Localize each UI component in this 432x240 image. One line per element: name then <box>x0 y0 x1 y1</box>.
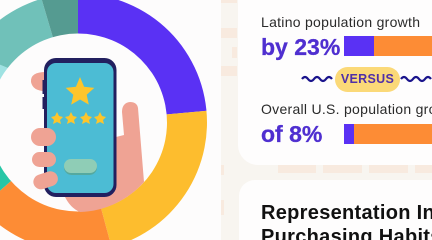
versus badge: VERSUS <box>341 72 394 86</box>
segment: orange <box>0 181 110 240</box>
hand palm <box>64 102 144 212</box>
donut chart <box>0 0 207 240</box>
value: by 23%: by 23% <box>261 34 340 60</box>
panel: population growth <box>238 0 432 165</box>
finger behind phone <box>31 72 48 91</box>
heading: representation <box>261 202 432 240</box>
segment: pale blue <box>0 64 8 80</box>
patterned background column <box>221 0 432 240</box>
segment: dark teal <box>42 0 78 38</box>
row of small stars <box>51 112 106 124</box>
squiggle left <box>301 76 333 82</box>
segment: light teal <box>0 0 53 68</box>
label: Latino population growth: Latino population growth <box>261 14 420 30</box>
fingers <box>31 128 60 191</box>
panel: representation heading <box>239 180 432 240</box>
phone side buttons <box>42 80 46 109</box>
phone body <box>44 58 116 197</box>
large star <box>66 77 94 105</box>
icon: hand holding phone <box>31 58 144 212</box>
button <box>64 159 97 173</box>
heading: representation: Representation In <box>261 202 432 224</box>
bar: Latino growth <box>344 36 432 56</box>
squiggle right <box>400 76 432 82</box>
segment: green <box>0 166 11 190</box>
background bricks <box>221 0 432 215</box>
versus badge <box>335 67 400 92</box>
button shadow <box>64 160 97 175</box>
phone screen <box>47 63 114 193</box>
value: of 8%: of 8% <box>261 121 322 147</box>
segment: yellow <box>101 110 207 240</box>
segment: purple <box>78 0 206 114</box>
bar: overall growth <box>344 124 432 144</box>
